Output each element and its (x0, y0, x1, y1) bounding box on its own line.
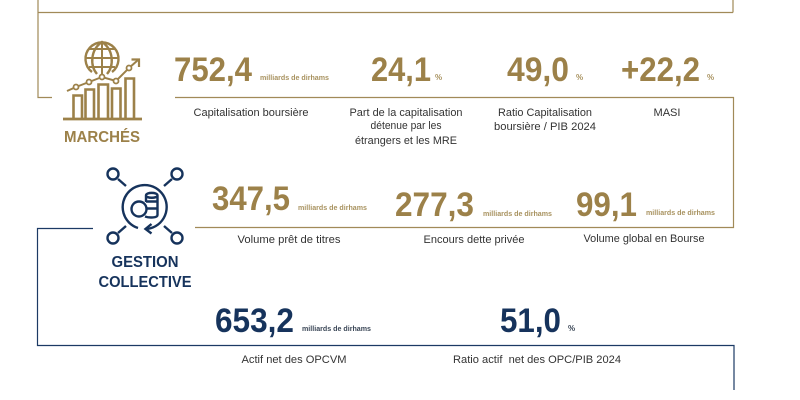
metric: ratio capitalisation / PIB (494, 51, 596, 133)
metric: part des étrangers et MRE: 24,1 (371, 51, 431, 89)
metric: volume prêt de titres: 347,5 (212, 180, 290, 218)
metric: actif net des OPCVM: milliards de dirhams (302, 326, 371, 333)
metric: encours dette privée: Encours dette privée (424, 234, 524, 246)
metric: MASI (621, 51, 714, 119)
heading: Gestion collective: GESTION (112, 254, 178, 271)
heading: Gestion collective: COLLECTIVE (98, 274, 192, 291)
metric: actif net des OPCVM: Actif net des OPCVM (242, 354, 346, 366)
metric: ratio actif net OPC / PIB (453, 302, 621, 366)
metric: part des étrangers et MRE: détenue par les (370, 120, 442, 132)
metric: MASI: % (707, 73, 714, 82)
metric: ratio actif net OPC / PIB: Ratio actif net des OPC/PIB 2024 (453, 354, 621, 366)
metric: actif net des OPCVM (215, 302, 371, 366)
metric: capitalisation boursière (174, 51, 329, 119)
metric: encours dette privée: milliards de dirhams (483, 211, 552, 218)
icon: collective management network (108, 168, 182, 244)
metric: ratio capitalisation / PIB: 49,0 (507, 51, 569, 89)
metric: part des étrangers et MRE: % (435, 73, 442, 82)
metric: part des étrangers et MRE (350, 51, 462, 147)
metric: volume prêt de titres: Volume prêt de titres (238, 234, 341, 246)
metric: MASI: MASI (654, 107, 680, 119)
metric: ratio capitalisation / PIB: Ratio Capitalisation (498, 107, 592, 119)
metric: encours dette privée: 277,3 (395, 186, 474, 224)
metric: encours dette privée (395, 186, 552, 246)
metric: volume global en Bourse: 99,1 (576, 186, 637, 224)
metric: ratio actif net OPC / PIB: 51,0 (500, 302, 561, 340)
metric: volume prêt de titres: milliards de dirhams (298, 205, 367, 212)
metric: MASI: +22,2 (621, 51, 700, 89)
metric: capitalisation boursière: Capitalisation boursière (194, 107, 308, 119)
metric: part des étrangers et MRE: Part de la capitalisation (350, 107, 462, 119)
metric: ratio actif net OPC / PIB: % (568, 324, 575, 333)
metric: volume global en Bourse: Volume global en Bourse (584, 233, 704, 245)
heading: Gestion collective (98, 254, 192, 291)
icon: markets globe and bar chart (63, 42, 142, 119)
metric: part des étrangers et MRE: étrangers et les MRE (355, 135, 457, 147)
metric: volume global en Bourse (576, 186, 715, 245)
metric: volume global en Bourse: milliards de dirhams (646, 210, 715, 217)
heading: Marchés: MARCHÉS (64, 127, 140, 146)
metric: ratio capitalisation / PIB: boursière / PIB 2024 (494, 121, 596, 133)
metric: capitalisation boursière: 752,4 (174, 51, 252, 89)
metric: volume prêt de titres (212, 180, 367, 246)
metric: capitalisation boursière: milliards de dirhams (260, 75, 329, 82)
metric: actif net des OPCVM: 653,2 (215, 302, 294, 340)
metric: ratio capitalisation / PIB: % (576, 73, 583, 82)
